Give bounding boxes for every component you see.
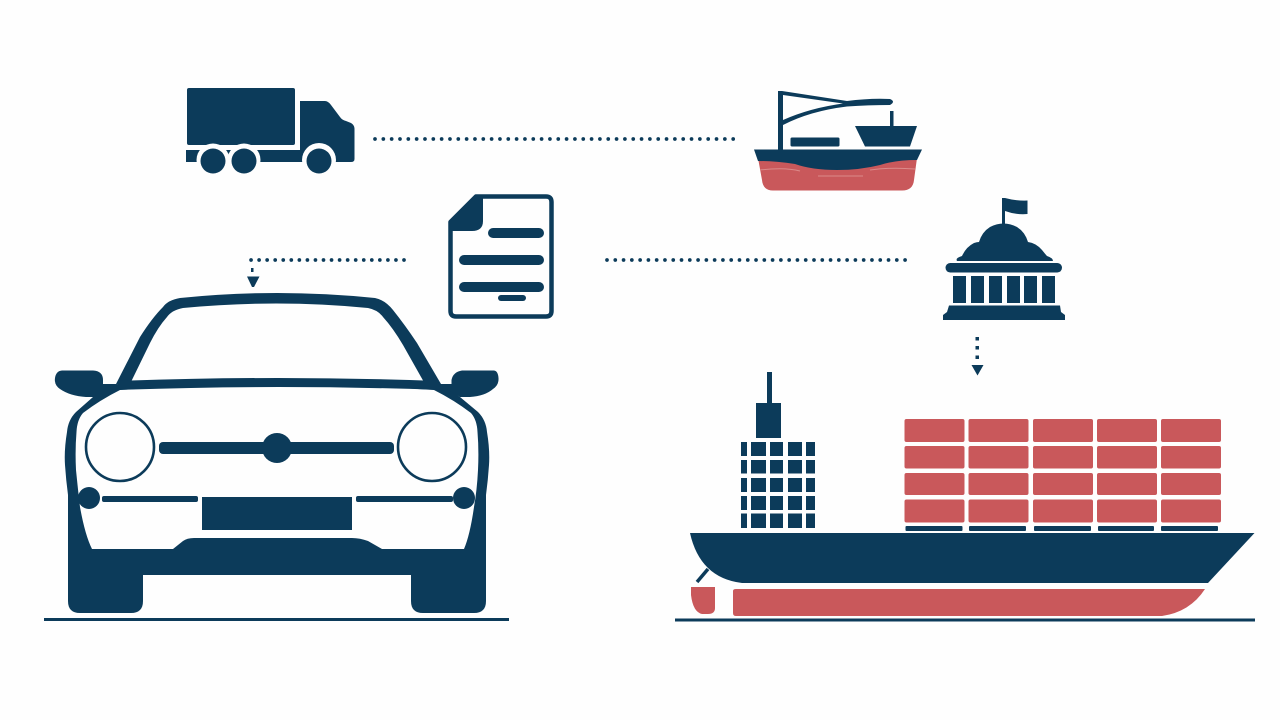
icon: car front view: [55, 293, 499, 613]
rudder strut: [697, 569, 708, 582]
ship hull lower: [733, 589, 1205, 616]
right headlight: [398, 413, 466, 481]
icon: small cargo ship: [754, 91, 922, 190]
left headlight: [86, 413, 154, 481]
arrow: truck to small ship dotted line: [375, 137, 734, 141]
bumper trim right: [356, 487, 475, 509]
icon: customs building: [943, 198, 1065, 320]
ship ground line: [675, 618, 1255, 622]
rudder: [691, 587, 715, 614]
car ground line: [44, 618, 509, 621]
left mirror: [55, 370, 118, 397]
bumper trim left: [78, 487, 198, 509]
car roof and pillars: [116, 293, 441, 384]
icon: document: [449, 195, 552, 316]
car body outline: [65, 384, 489, 613]
ship hull upper: [690, 533, 1254, 583]
ship mast and bridge: [756, 372, 781, 438]
license plate: [202, 497, 352, 530]
right mirror: [438, 370, 499, 397]
grille bar with badge: [159, 433, 394, 463]
container base bars: [906, 526, 1218, 531]
car hood line: [118, 378, 442, 390]
arrow: document to customs dotted line: [607, 258, 906, 262]
ship superstructure windows: [741, 442, 815, 528]
arrow: customs to container ship: [972, 337, 984, 376]
arrow: document to car dotted line: [247, 260, 404, 287]
icon: container ship: [690, 372, 1254, 616]
shipping containers: [904, 419, 1221, 522]
icon: truck: [186, 88, 354, 177]
car body panel: [76, 385, 478, 549]
